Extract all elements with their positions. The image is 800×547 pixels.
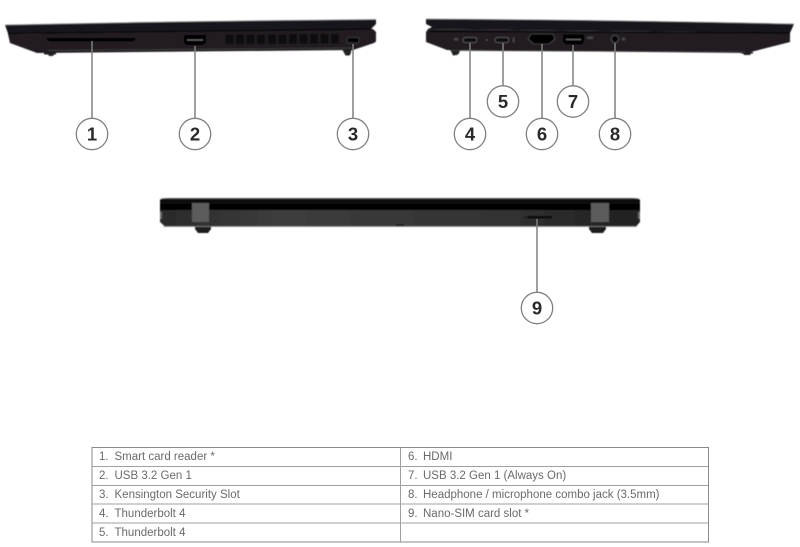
Kensington slot (347, 38, 359, 43)
row 1 right: HDMI (423, 451, 452, 463)
row 3 right: Headphone / microphone combo jack (3.5mm) (423, 489, 660, 501)
callout 7 (557, 45, 589, 117)
row 4 right: Nano-SIM card slot * (423, 508, 530, 520)
callout 3: 3 (348, 124, 358, 144)
HDMI port (528, 34, 555, 44)
row 1 left: Smart card reader * (114, 451, 215, 463)
audio jack (611, 35, 619, 43)
callout 2 (179, 46, 211, 150)
laptop: right side view (426, 19, 794, 56)
row 4 left: 4. (99, 508, 109, 520)
USB port (563, 34, 584, 44)
nano-SIM slot (527, 216, 552, 218)
callout 6 (526, 44, 558, 150)
vents (226, 34, 339, 44)
callout 8 (599, 43, 631, 150)
row 3 left: 3. (99, 489, 109, 501)
row 5 left: Thunderbolt 4 (114, 527, 186, 539)
row 5 left: 5. (99, 527, 109, 539)
row 2 right: USB 3.2 Gen 1 (Always On) (423, 470, 566, 482)
callout 9: 9 (532, 298, 542, 318)
USB port (184, 35, 206, 45)
row 2 left: USB 3.2 Gen 1 (114, 470, 192, 482)
hinge left (192, 203, 209, 222)
ports table (92, 448, 708, 542)
callout 5: 5 (498, 91, 508, 112)
callout 8: 8 (610, 124, 620, 144)
callout 6: 6 (537, 124, 547, 144)
callout 9 (521, 219, 553, 324)
laptop: rear view (160, 198, 640, 233)
callout 1: 1 (87, 124, 97, 144)
callout 5 (487, 43, 519, 117)
row 1 left: 1. (99, 451, 109, 463)
hinge right (591, 203, 609, 222)
callout 1 (76, 41, 108, 150)
row 2 left: 2. (99, 470, 109, 482)
smart card slot (46, 38, 136, 42)
callout 7: 7 (568, 91, 578, 112)
callout 2: 2 (190, 124, 200, 144)
Thunderbolt port 5 (495, 38, 509, 42)
row 2 right: 7. (408, 470, 418, 482)
callout 3 (337, 44, 369, 150)
row 4 right: 9. (408, 508, 418, 520)
callout 4: 4 (465, 124, 476, 144)
row 4 left: Thunderbolt 4 (114, 508, 186, 520)
row 3 left: Kensington Security Slot (114, 489, 241, 501)
callout 4 (454, 43, 486, 150)
Thunderbolt port 4 (463, 38, 477, 42)
row 1 right: 6. (408, 451, 418, 463)
row 3 right: 8. (408, 489, 418, 501)
laptop: left side view (5, 20, 376, 56)
